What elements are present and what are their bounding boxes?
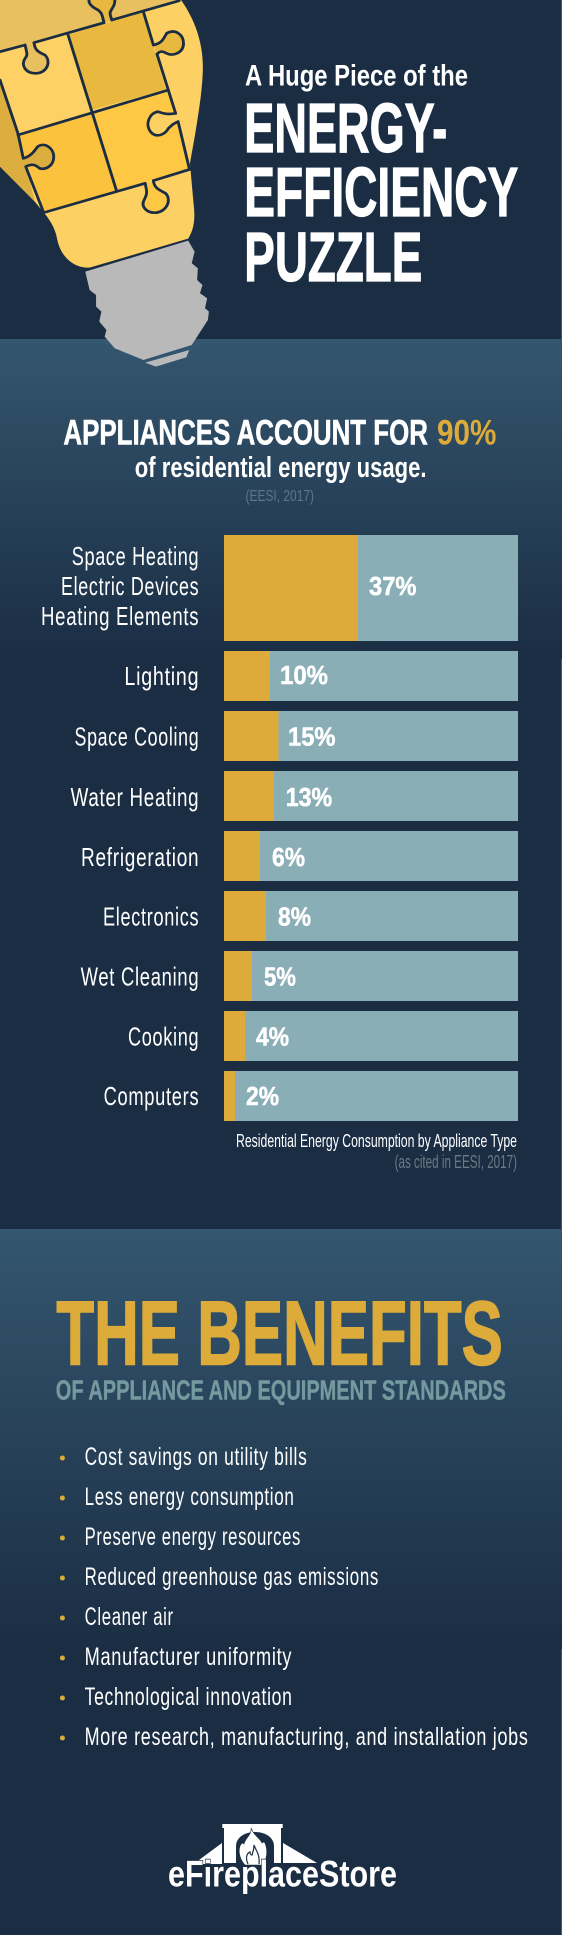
- bar: lighting: 10%: [280, 662, 328, 690]
- benefits list: Manufacturer uniformity: [85, 1643, 292, 1671]
- bar: space cooling: Space Cooling: [74, 722, 199, 752]
- logo: eFireplaceStore: [168, 1824, 397, 1895]
- source citation: (EESI, 2017): [246, 488, 314, 505]
- bar: water heating: [71, 771, 518, 821]
- benefits list: Preserve energy resources: [85, 1523, 301, 1551]
- heading: appliances: 90%: [437, 412, 496, 452]
- bar: cooking: Cooking: [128, 1022, 199, 1052]
- title kicker: A Huge Piece of the: [245, 60, 468, 93]
- benefits list: Cleaner air: [85, 1603, 174, 1631]
- bar: lighting: [124, 651, 518, 701]
- heading: appliances: [63, 412, 496, 484]
- icon: puzzle light bulb: [0, 0, 209, 367]
- bar: refrigeration: Refrigeration: [81, 842, 199, 872]
- bar: space cooling: [74, 711, 518, 761]
- bar: electronics: [103, 891, 518, 941]
- benefits list: Technological innovation: [85, 1683, 293, 1711]
- bar: electronics: Electronics: [103, 902, 199, 932]
- bar: space heating, electric devices, heating elements: [41, 535, 518, 641]
- bar: electronics: 8%: [278, 904, 311, 932]
- bar: wet cleaning: Wet Cleaning: [81, 962, 199, 992]
- bar: cooking: [128, 1011, 518, 1061]
- benefits list: [60, 1443, 529, 1751]
- bar: space cooling: 15%: [288, 724, 336, 752]
- bar: refrigeration: [81, 831, 518, 881]
- title: [244, 60, 518, 296]
- benefits list: Reduced greenhouse gas emissions: [85, 1563, 379, 1591]
- bar: computers: Computers: [104, 1081, 199, 1111]
- bar: computers: [104, 1071, 518, 1121]
- bar: space heating, electric devices, heating elements: Heating Elements: [41, 601, 199, 631]
- heading: appliances: of residential energy usage.: [135, 452, 427, 484]
- bar: refrigeration: 6%: [272, 844, 305, 872]
- bar: lighting: Lighting: [124, 661, 199, 691]
- title line: energy: ENERGY-: [244, 89, 447, 167]
- bar: cooking: 4%: [256, 1024, 289, 1052]
- bar: space heating, electric devices, heating elements: Electric Devices: [61, 571, 199, 601]
- logo: eFireplaceStore: eFireplaceStore: [168, 1854, 397, 1895]
- heading: appliances: APPLIANCES ACCOUNT FOR: [63, 412, 428, 452]
- bar: wet cleaning: 5%: [264, 964, 296, 992]
- bar: space heating, electric devices, heating elements: 37%: [369, 573, 416, 601]
- bar: computers: 2%: [246, 1083, 279, 1111]
- bar chart: [41, 535, 518, 1121]
- title line: puzzle: PUZZLE: [244, 218, 422, 296]
- bar: wet cleaning: [81, 951, 518, 1001]
- bar: water heating: Water Heating: [71, 782, 199, 812]
- bar: water heating: 13%: [286, 784, 332, 812]
- bar: space heating, electric devices, heating elements: Space Heating: [72, 541, 199, 571]
- benefits list: Cost savings on utility bills: [85, 1443, 307, 1471]
- benefits list: Less energy consumption: [85, 1483, 295, 1511]
